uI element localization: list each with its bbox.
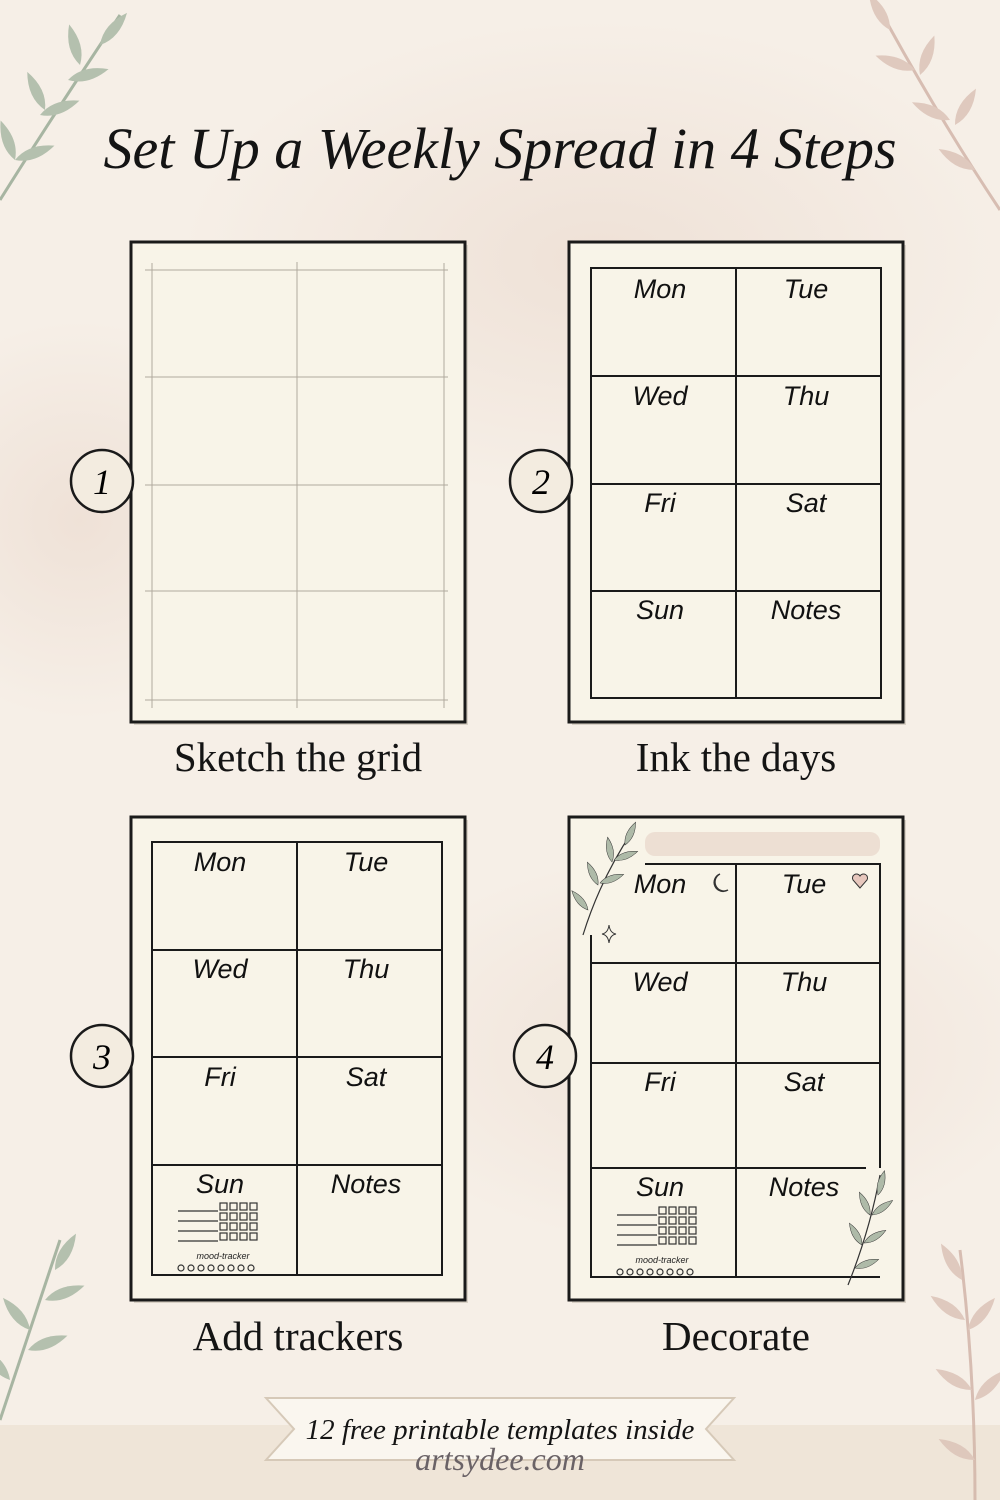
panel: step 4 decorate: Fri [644, 1067, 677, 1097]
leaves: bottom-right sprig [927, 1241, 1000, 1500]
icon: moon [714, 874, 728, 891]
panel: step 3 add trackers: Sun [196, 1169, 244, 1199]
panel: step 3 add trackers: Thu [343, 954, 389, 984]
panel: step 3 add trackers [131, 817, 468, 1303]
caption 3: Add trackers [193, 1313, 403, 1359]
panel: step 2 ink the days: Thu [783, 381, 829, 411]
caption 2: Ink the days [636, 734, 836, 780]
panel: step 3 add trackers: Tue [344, 847, 388, 877]
panel: step 4 decorate: Mon [634, 869, 686, 899]
panel: step 4 decorate: Thu [781, 967, 827, 997]
caption 4: Decorate [662, 1313, 810, 1359]
ribbon banner: 12 free printable templates inside [306, 1414, 694, 1446]
panel: step 2 ink the days: Sat [786, 488, 828, 518]
leaves: top-left sprig [0, 9, 131, 200]
ribbon banner [266, 1398, 734, 1460]
leaf sprig top-left of card [569, 821, 639, 935]
panel: step 3 add trackers: Wed [192, 954, 248, 984]
panel: step 3 add trackers: Mon [194, 847, 246, 877]
panel: step 4 decorate: mood-tracker [635, 1255, 690, 1265]
leaf sprig bottom-right of card [847, 1170, 895, 1285]
leaves: bottom-left sprig [0, 1231, 86, 1420]
panel: step 2 ink the days: Fri [644, 488, 677, 518]
panel: step 2 ink the days: Tue [784, 274, 828, 304]
caption 1: Sketch the grid [174, 734, 422, 780]
panel: step 4 decorate: Sun [636, 1172, 684, 1202]
panel: step 4 decorate: Wed [632, 967, 688, 997]
panel: step 4 decorate: Notes [769, 1172, 839, 1202]
badge 4: 4 [536, 1037, 554, 1077]
panel: step 3 add trackers: Fri [204, 1062, 237, 1092]
title: Set Up a Weekly Spread in 4 Steps [103, 116, 897, 181]
panel: step 4 decorate: Tue [782, 869, 826, 899]
mood tracker 4 [617, 1207, 696, 1275]
badge 3: 3 [92, 1037, 111, 1077]
badge 2: 2 [532, 462, 550, 502]
mood tracker [178, 1203, 257, 1271]
panel: step 2 ink the days: Sun [636, 595, 684, 625]
panel: step 2 ink the days: Wed [632, 381, 688, 411]
footer url: artsydee.com [415, 1441, 585, 1477]
icon: heart [852, 874, 868, 888]
badge 3 [71, 1025, 133, 1087]
leaves: top-right sprig [864, 0, 1000, 210]
badge 2 [510, 450, 572, 512]
panel: step 2 ink the days [569, 242, 906, 725]
panel: step 4 decorate [569, 817, 906, 1303]
badge 4 [514, 1025, 576, 1087]
panel: step 3 add trackers: Notes [331, 1169, 401, 1199]
panel: step 3 add trackers: mood-tracker [196, 1251, 251, 1261]
badge 1 [71, 450, 133, 512]
badge 1: 1 [93, 462, 111, 502]
panel: step 3 add trackers: Sat [346, 1062, 388, 1092]
panel: step 2 ink the days: Notes [771, 595, 841, 625]
icon: sparkle [602, 925, 616, 943]
panel: step 2 ink the days: Mon [634, 274, 686, 304]
washi tape [645, 832, 880, 856]
panel: step 4 decorate: Sat [784, 1067, 826, 1097]
panel: step 1 sketch grid [131, 242, 468, 725]
